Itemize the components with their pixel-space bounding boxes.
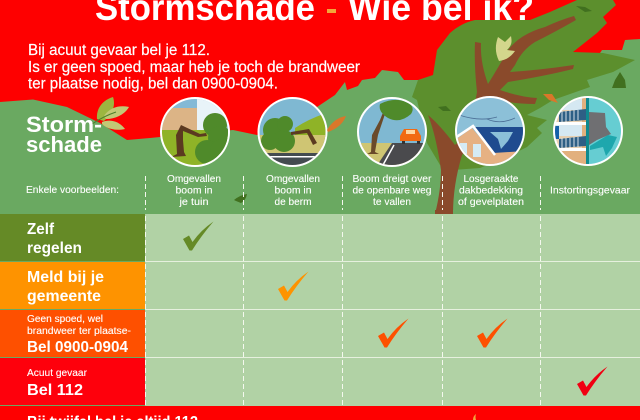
table grid	[0, 176, 640, 406]
column labels: boom in	[176, 186, 213, 196]
row: Bel 0900-0904: brandweer ter plaatse-	[27, 326, 131, 337]
bottom banner	[0, 406, 640, 420]
column labels: Boom dreigt over	[352, 174, 432, 185]
title dash	[327, 9, 336, 13]
row: Zelf regelen: regelen	[27, 240, 82, 257]
orange leaf	[543, 94, 558, 103]
column labels: je tuin	[178, 197, 209, 208]
intro text: ter plaatse nodig, bel dan 0900-0904.	[28, 76, 278, 92]
row: Bel 0900-0904: Bel 0900-0904	[27, 339, 128, 356]
intro text: Bij acuut gevaar bel je 112.	[28, 42, 210, 59]
row: Zelf regelen	[0, 214, 145, 261]
row: Zelf regelen: Zelf	[27, 221, 55, 238]
column labels: dakbedekking	[459, 186, 523, 196]
heading: Storm-schade: Storm-	[26, 112, 102, 137]
row: Bel 0900-0904: Geen spoed, wel	[27, 314, 103, 325]
red storm sky	[0, 0, 640, 140]
tree	[412, 0, 635, 214]
column labels: of gevelplaten	[458, 197, 524, 208]
icon: tree over public road	[357, 97, 430, 170]
small leaf near label	[234, 194, 247, 203]
icon: fallen tree on verge	[258, 97, 330, 169]
icon: fallen tree in garden	[160, 97, 234, 170]
column labels: te vallen	[373, 197, 411, 208]
icon: collapse danger	[553, 96, 624, 168]
column labels	[26, 174, 631, 208]
orange leaf between circles	[327, 116, 346, 132]
tree foliage	[412, 0, 635, 170]
row: Meld bij je gemeente: Meld bij je	[27, 269, 104, 286]
small leaves	[438, 6, 626, 111]
column labels: Omgevallen	[266, 174, 320, 185]
column labels: Instortingsgevaar	[550, 186, 631, 196]
row: Meld bij je gemeente	[0, 262, 145, 309]
row: Meld bij je gemeente: gemeente	[27, 288, 101, 305]
column labels: Losgeraakte	[464, 174, 519, 185]
heading: Storm-schade: schade	[26, 132, 102, 157]
heading: Storm-schade	[26, 112, 102, 157]
leaf on tree	[496, 36, 515, 61]
column labels: Omgevallen	[167, 174, 221, 185]
title	[95, 0, 534, 28]
icon: loose roofing	[455, 96, 527, 168]
intro text: Is er geen spoed, maar heb je toch de brandweer	[28, 59, 360, 76]
column labels: de openbare weg	[352, 186, 432, 196]
column labels: boom in	[274, 186, 312, 196]
leaf cluster by heading	[92, 97, 129, 130]
row: Bel 112: Bel 112	[27, 382, 83, 399]
row: Bel 112: Acuut gevaar	[27, 368, 88, 379]
row label intro: Enkele voorbeelden:	[26, 185, 119, 196]
intro text	[28, 42, 360, 92]
row: Bel 112	[0, 358, 145, 405]
column labels: de berm	[274, 197, 312, 208]
row: Bel 0900-0904	[0, 310, 145, 357]
checkmarks	[183, 222, 608, 396]
trunk and branches	[428, 16, 576, 214]
